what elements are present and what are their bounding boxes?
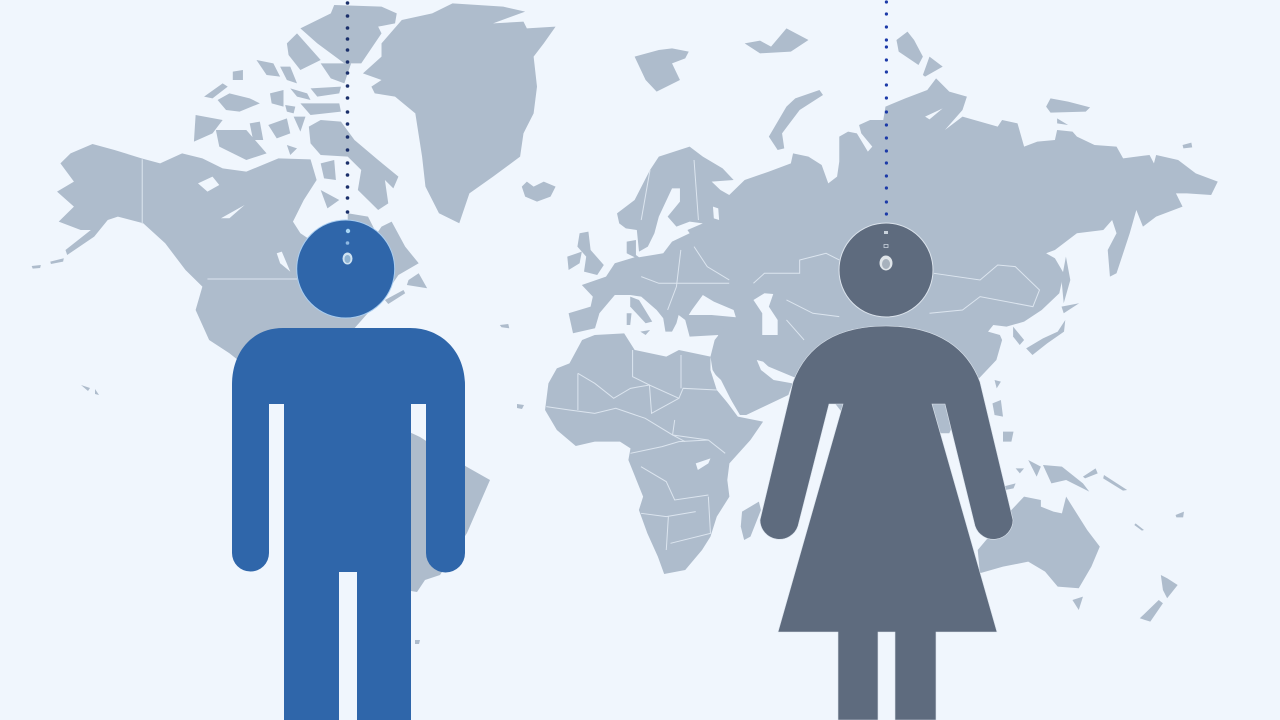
- man body: [232, 328, 465, 720]
- woman dotted line: [885, 0, 888, 216]
- map: Africa and Arabia: [545, 327, 795, 574]
- woman head: [839, 223, 933, 317]
- figure: man: [232, 1, 465, 720]
- map: Greenland and Iceland: [363, 3, 556, 223]
- man head: [297, 220, 395, 318]
- map: Eurasia: [567, 28, 1218, 433]
- man dotted line: [346, 1, 349, 214]
- map: Oceania and East Asia islands: [978, 320, 1184, 622]
- woman head droplet marks: [880, 231, 892, 270]
- figure: woman: [760, 0, 1013, 720]
- map: North America and Arctic Canada: [32, 5, 509, 367]
- woman body: [760, 326, 1013, 720]
- map: Pacific dots: [81, 385, 524, 644]
- man head droplet marks: [342, 229, 352, 264]
- map: South America: [405, 430, 490, 592]
